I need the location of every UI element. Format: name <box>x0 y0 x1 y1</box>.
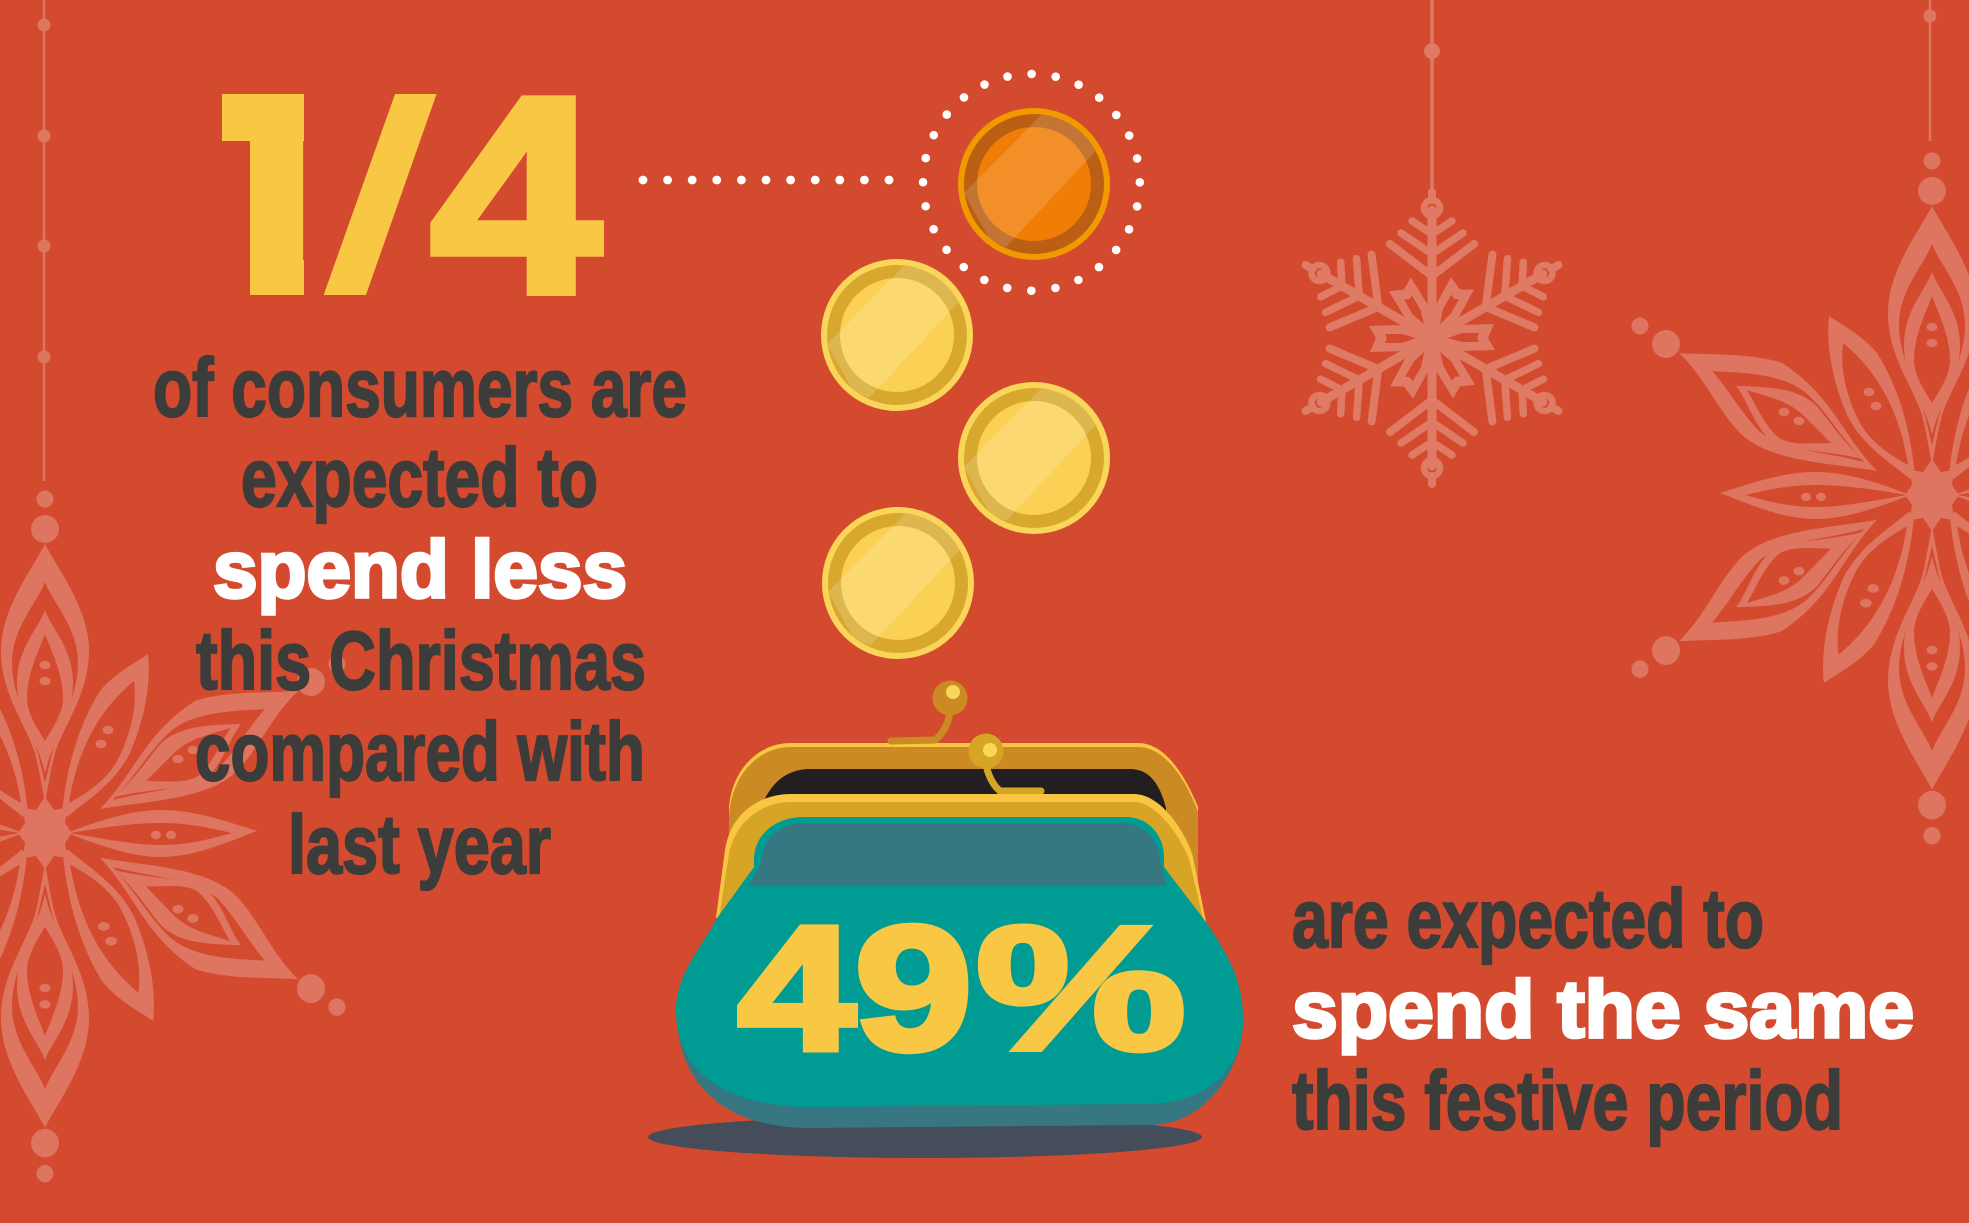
text block: one quarter spend less: this Christmas <box>196 614 646 707</box>
text block: half spend the same <box>1292 872 1914 1147</box>
purse front frame <box>716 794 1206 922</box>
ornament: hanging snowflake <box>1285 0 1579 484</box>
coin: yellow 1 <box>821 259 983 411</box>
purse <box>648 680 1243 1158</box>
text block: one quarter spend less: last year <box>288 798 551 891</box>
purse inner panel <box>748 823 1167 886</box>
ornament: left hanging star flower <box>0 0 346 1182</box>
front clasp <box>968 734 1041 791</box>
big statistic: 1/4 <box>222 94 604 296</box>
big statistic: 1/4: / <box>313 39 448 353</box>
statistic: 49% <box>738 891 1186 1087</box>
coin: orange <box>958 108 1120 260</box>
coin: yellow 2 <box>958 382 1120 534</box>
coin: yellow 3 <box>822 507 984 659</box>
text block: one quarter spend less: compared with <box>195 705 645 798</box>
dotted ring around orange coin <box>923 74 1140 291</box>
purse base depth <box>678 1020 1243 1128</box>
text block: one quarter spend less: of consumers are <box>153 341 687 434</box>
text block: half spend the same: are expected to <box>1292 872 1764 965</box>
ornament: right hanging star flower <box>1632 0 1969 844</box>
big statistic: 1/4: 1 <box>175 38 362 352</box>
back clasp <box>891 680 968 741</box>
purse opening <box>762 769 1166 830</box>
statistic: 49%: % <box>976 891 1186 1087</box>
purse back frame <box>729 743 1198 900</box>
text block: one quarter spend less: expected to <box>241 431 598 524</box>
text block: half spend the same: spend the same <box>1292 965 1914 1055</box>
statistic: 49%: 49 <box>738 891 972 1087</box>
text block: one quarter spend less: spend less <box>213 525 627 615</box>
purse shadow <box>648 1116 1202 1158</box>
dotted connector <box>639 176 893 184</box>
big statistic: 1/4: 4 <box>430 40 603 352</box>
purse body <box>676 817 1243 1107</box>
text block: one quarter spend less <box>153 341 687 891</box>
